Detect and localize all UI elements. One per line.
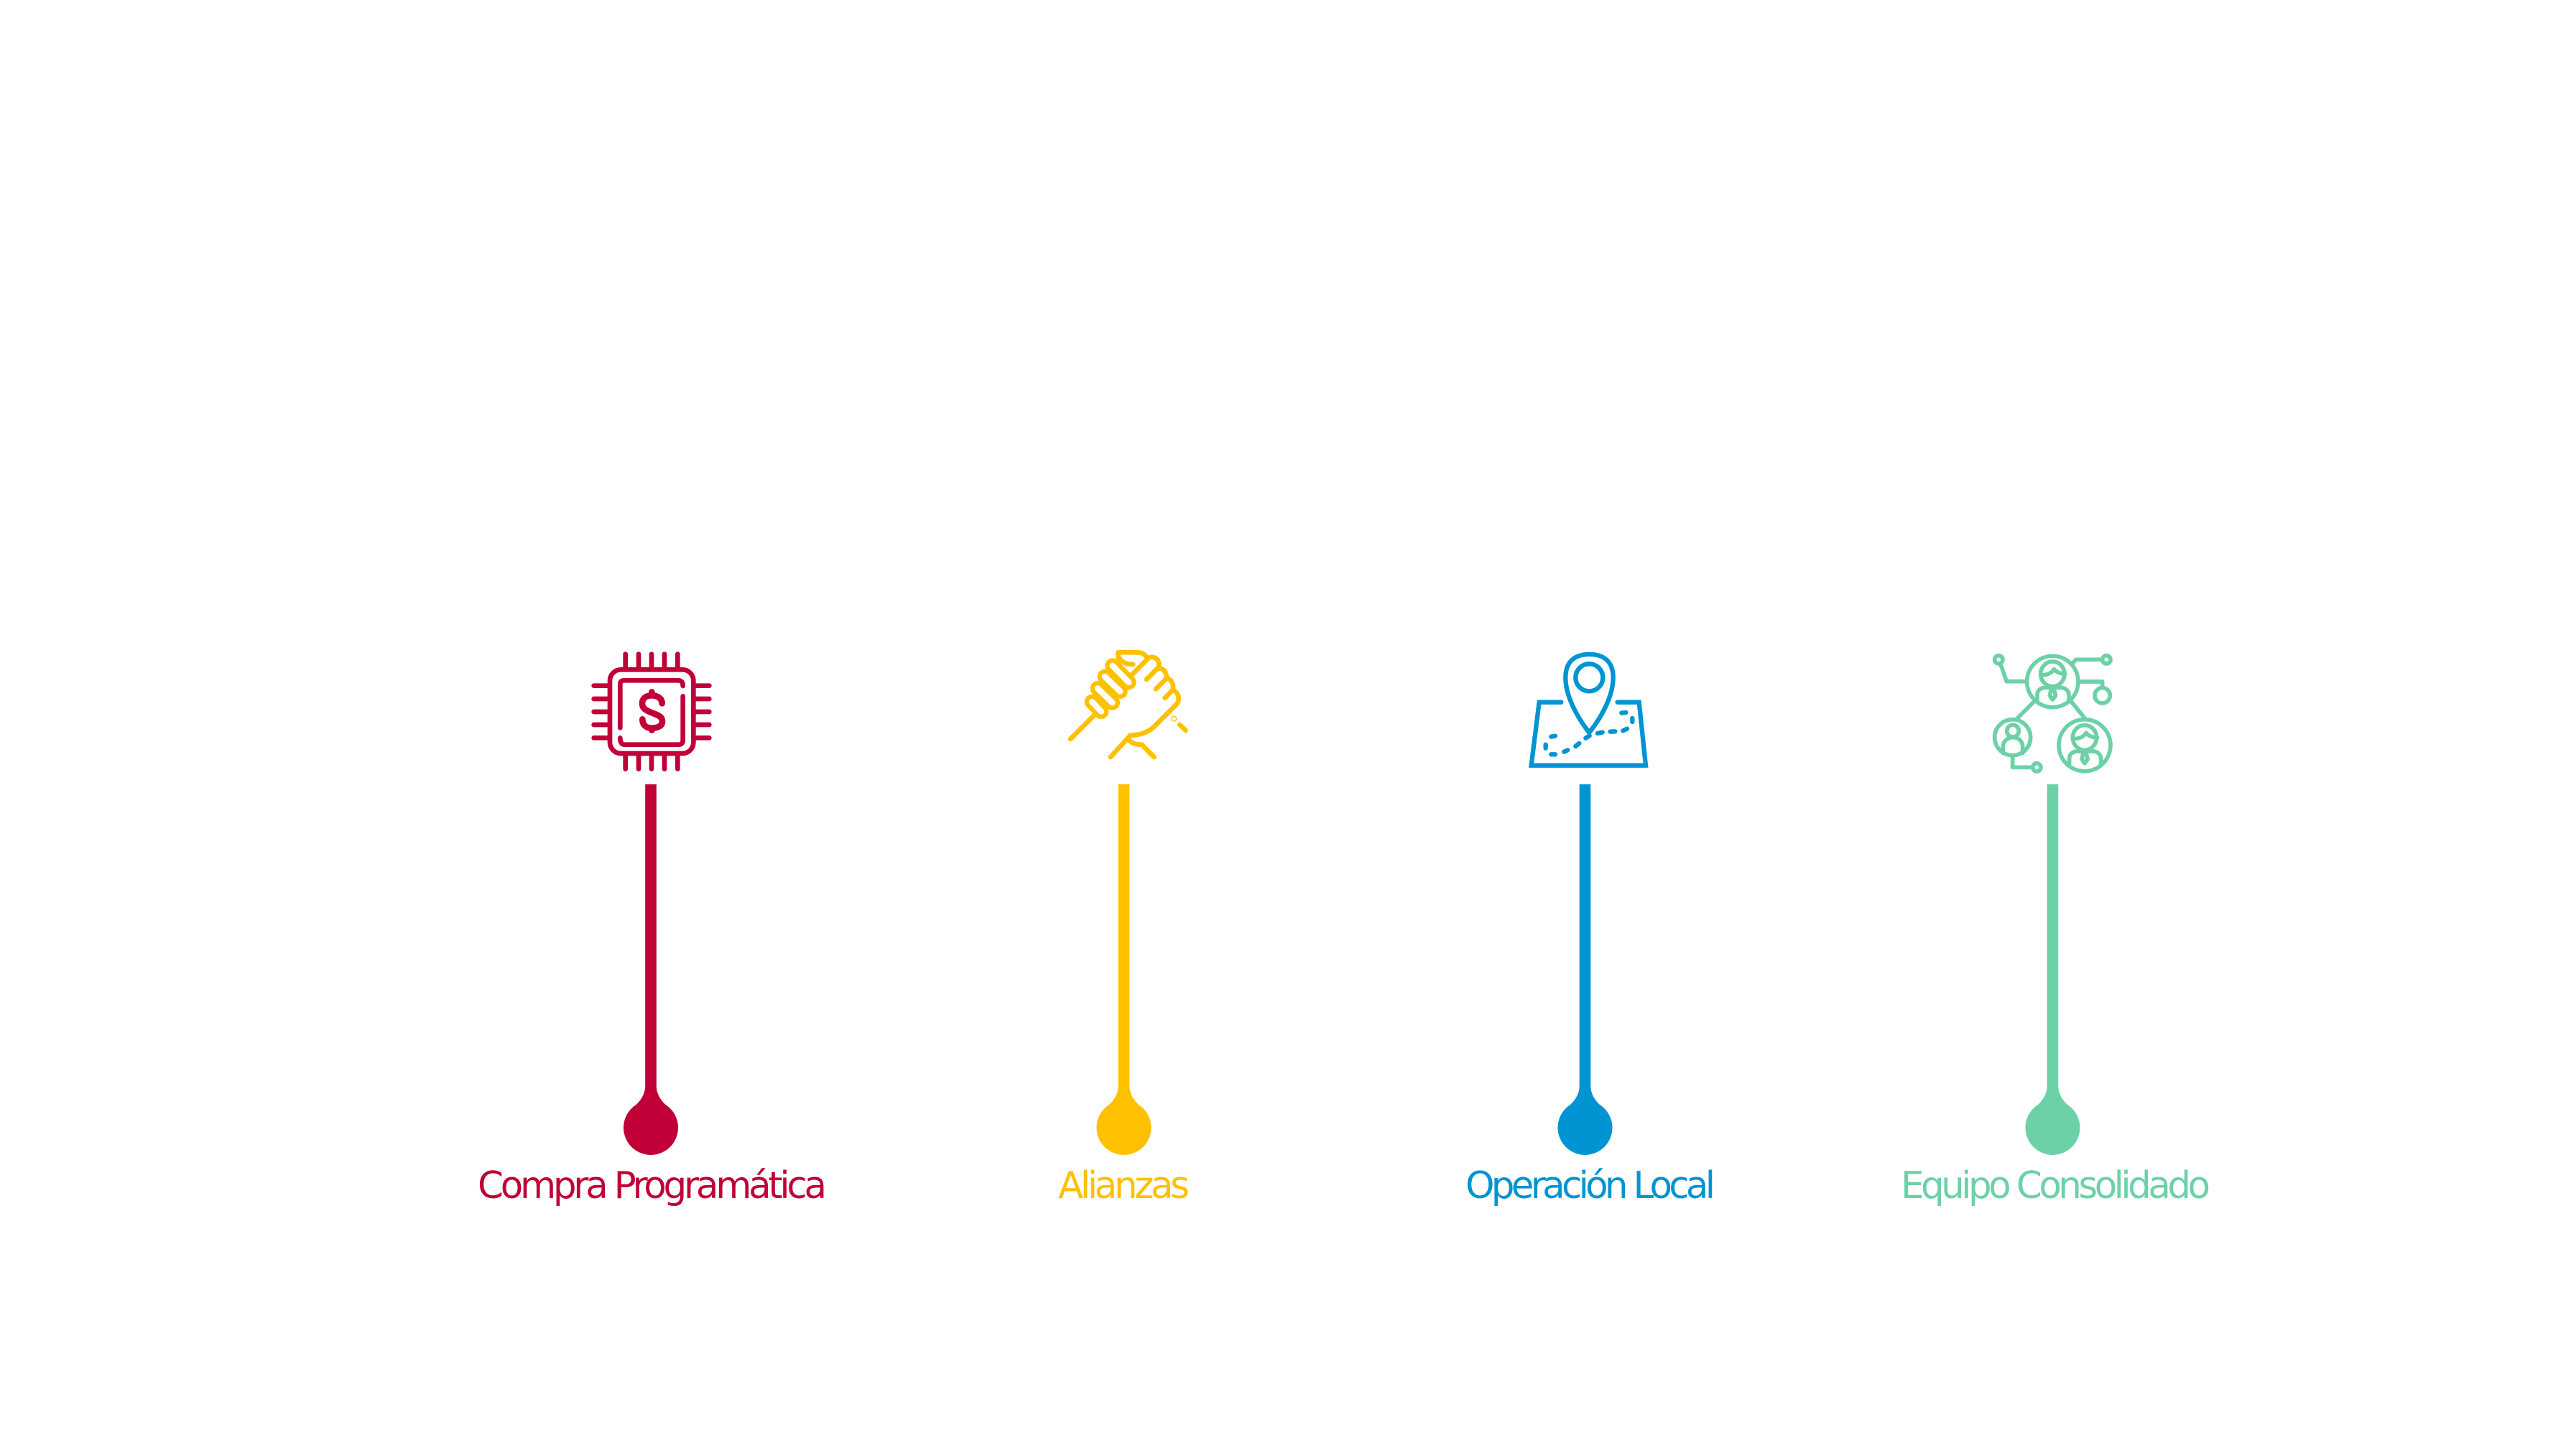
panel: Alianzas (1058, 652, 1190, 1207)
label: Operación Local (1465, 1164, 1715, 1207)
label: Alianzas (1058, 1164, 1190, 1207)
label: Compra Programática (478, 1164, 827, 1207)
panel: Compra Programática (478, 654, 827, 1207)
stem with round drop (624, 784, 678, 1155)
icon: microchip with dollar sign (594, 654, 709, 769)
panel: Operación Local (1465, 654, 1715, 1207)
stem with round drop (1096, 784, 1151, 1155)
panel: Equipo Consolidado (1901, 656, 2210, 1207)
icon: clasped hands (1070, 652, 1186, 757)
icon: connected team network (1995, 656, 2111, 771)
stem with round drop (1557, 784, 1612, 1155)
label: Equipo Consolidado (1901, 1164, 2210, 1207)
stem with round drop (2026, 784, 2080, 1155)
icon: map with location pin (1532, 654, 1646, 766)
